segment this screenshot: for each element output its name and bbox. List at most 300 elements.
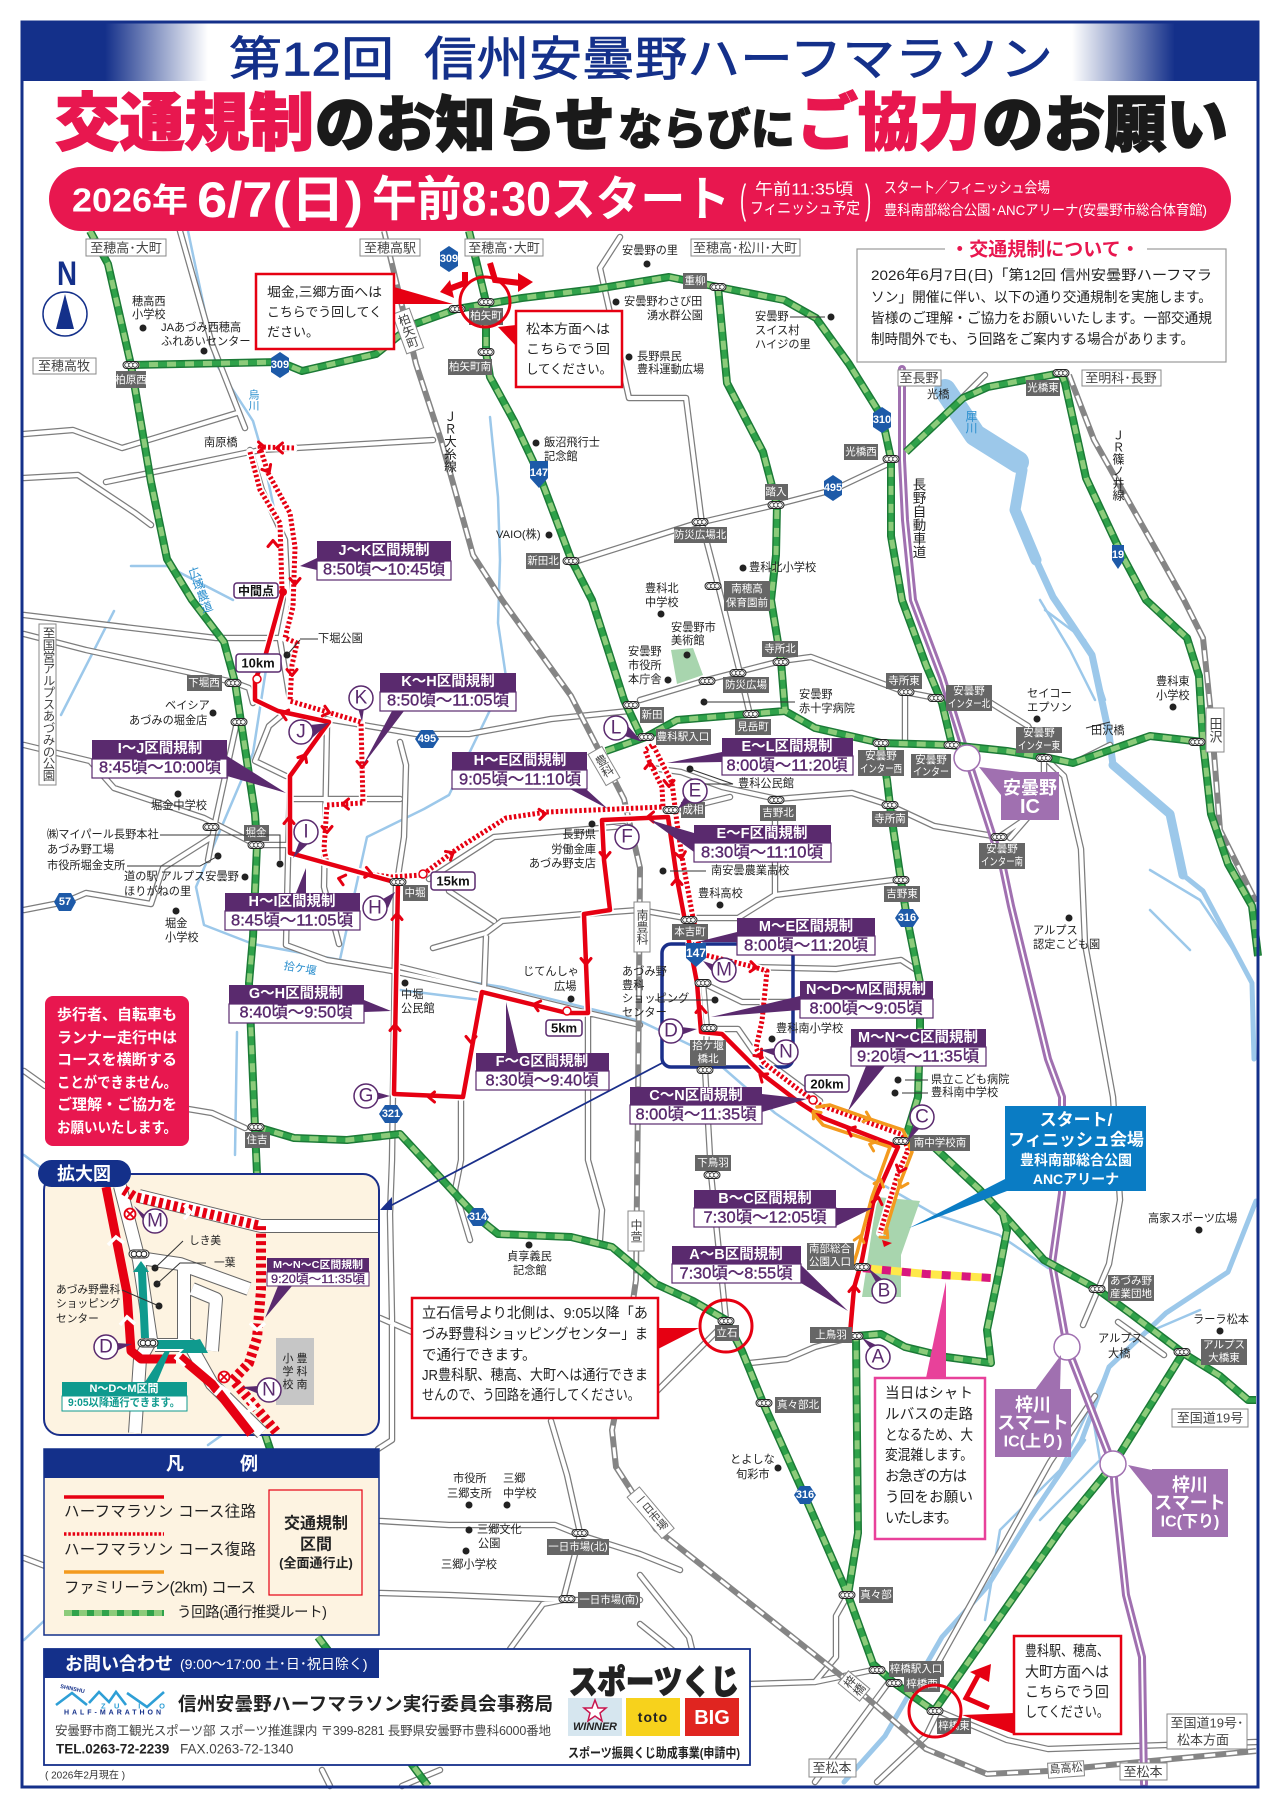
checkpoint letters: J — [296, 722, 306, 742]
organiser text — [55, 1694, 553, 1756]
intersection name labels: 踏入 — [766, 485, 787, 498]
landmarks: 下堀公園 — [318, 632, 363, 645]
direction signs: 柏矢町 — [395, 310, 421, 350]
sports lottery logos: スポーツ振興くじ助成事業(申請中) — [568, 1746, 740, 1760]
callout: Azusabashi detour: 豊科駅、穂高、 — [1025, 1643, 1109, 1660]
course direction arrows — [258, 442, 908, 1292]
landmarks: 堀金中学校 — [151, 798, 207, 812]
sports lottery logos: スポーツくじ — [569, 1664, 739, 1700]
intersection name labels: 安曇野 — [865, 750, 897, 762]
map feature names: 広域農道 — [185, 565, 215, 615]
card N-D-M: N～D～M区間規制 — [806, 981, 926, 998]
compass: N — [57, 255, 77, 293]
intersection name labels — [115, 273, 1247, 1734]
checkpoint letters: L — [611, 718, 621, 738]
intersection name labels: 一日市場(南) — [579, 1593, 639, 1606]
legend panel — [44, 1449, 379, 1635]
kilometre markers: 15km — [436, 874, 470, 888]
card I-J: 8:45頃～10:00頃 — [99, 758, 221, 776]
card E-F — [650, 820, 831, 862]
IC label Azusagawa down — [1128, 1465, 1228, 1537]
legend regulated section box: (全面通行止) — [279, 1556, 353, 1570]
compass — [43, 255, 87, 336]
kilometre markers: 5km — [551, 1020, 577, 1036]
landmarks: 旬彩市 — [736, 1468, 770, 1481]
card B-C: 7:30頃～12:05頃 — [704, 1208, 826, 1226]
legend outbound: ハーフマラソン コース往路 — [64, 1502, 256, 1520]
card E-L — [667, 738, 853, 775]
checkpoint letters: C — [915, 1106, 929, 1128]
card E-L: 8:00頃～11:20頃 — [726, 756, 848, 774]
route shields — [54, 246, 1124, 1504]
intersection name labels: 安曇野 — [915, 754, 947, 766]
legend detour: う回路(通行推奨ルート) — [177, 1604, 327, 1621]
map feature names: 長野自動車道 — [910, 478, 926, 560]
callout: Matsumoto direction: 松本方面へは — [526, 322, 610, 336]
card F-G — [476, 1002, 609, 1090]
kilometre markers: 10km — [241, 656, 275, 670]
direction signs: 至国営アルプスあづみの公園 — [40, 626, 55, 782]
landmarks: 美術館 — [671, 633, 705, 647]
intersection name labels: 新田北 — [527, 555, 559, 567]
intersection name labels: 成相 — [682, 803, 704, 816]
card M-N-C: 9:20頃～11:35頃 — [857, 1048, 979, 1066]
intersection name labels: 産業団地 — [1110, 1287, 1152, 1300]
intersection name labels: 立石 — [716, 1326, 738, 1339]
inset teal arrows — [133, 1261, 208, 1382]
card K-H: 8:50頃～11:05頃 — [387, 692, 509, 710]
railways — [384, 231, 1256, 1774]
marathon logo: SHINSHU — [60, 1684, 85, 1695]
start finish venue box: スタート/ — [1040, 1110, 1113, 1130]
inset course — [106, 1187, 278, 1434]
landmarks: 豊科南中学校 — [931, 1085, 998, 1099]
card A-B: 7:30頃～8:55頃 — [680, 1264, 792, 1282]
organiser text: FAX.0263-72-1340 — [180, 1742, 293, 1756]
intersection name labels: 保育園前 — [726, 596, 768, 609]
map feature names: ＪＲ篠ノ井線 — [1111, 429, 1125, 501]
inset school block: 小学校 — [281, 1352, 294, 1392]
card J-K: J～K区間規制 — [338, 542, 430, 559]
direction signs: 島高松 — [1049, 1760, 1083, 1776]
callout: shuttle bus road: ルバスの走路 — [885, 1406, 974, 1423]
callout: Azusabashi detour — [962, 1636, 1121, 1734]
inset checkpoint letters: N — [262, 1380, 276, 1400]
direction signs: 至穂高駅 — [364, 240, 416, 256]
callout: Horigane direction: ださい。 — [267, 324, 319, 340]
card I-J: I～J区間規制 — [118, 740, 202, 757]
checkpoint letters: H — [368, 898, 382, 918]
notice: pedestrians and cyclists: コースを横断する — [57, 1052, 177, 1068]
landmarks: あづみ野支店 — [529, 857, 596, 870]
callout: shuttle bus road: お急ぎの方は — [885, 1468, 967, 1485]
legend panel: 例 — [240, 1454, 258, 1474]
intersection name labels: 下鳥羽 — [697, 1156, 729, 1169]
intersection name labels: 真々部 — [860, 1588, 892, 1601]
route shields: 321 — [382, 1108, 400, 1120]
marker circle: Tateishi — [700, 1300, 752, 1352]
route shields: 314 — [469, 1211, 488, 1223]
card M-N-C: M～N～C区間規制 — [858, 1029, 978, 1046]
route shields: 495 — [824, 482, 842, 494]
landmarks: 安曇野市 — [671, 621, 716, 634]
landmarks: 三郷支所 — [447, 1486, 492, 1500]
landmarks: 中学校 — [503, 1486, 537, 1500]
checkpoint letters — [289, 686, 934, 1369]
about traffic regulation box: 制時間外でも、う回路をご案内する場合があります。 — [871, 331, 1194, 347]
title: 第12回 — [229, 32, 394, 86]
intersection name labels: 吉野東 — [886, 887, 918, 900]
direction signs: 至松本 — [1123, 1764, 1163, 1780]
landmarks: 長野県民 — [637, 350, 682, 363]
half marathon course outbound — [255, 592, 898, 1334]
checkpoint letters: D — [664, 1020, 678, 1042]
subtitle: 交通規制 — [55, 89, 314, 159]
inset arrow head — [380, 1197, 392, 1210]
checkpoint letters: B — [878, 1280, 890, 1302]
landmarks: 記念館 — [544, 450, 578, 463]
card B-C — [694, 1190, 873, 1227]
intersection name labels: 南中学校南 — [914, 1136, 966, 1149]
IC label Azumino: 安曇野 — [1003, 778, 1057, 798]
map feature names: 烏川 — [247, 388, 260, 411]
contact header: お問い合わせ — [65, 1654, 173, 1674]
marathon logo: ZU I O — [101, 1702, 165, 1710]
landmarks: 中学校 — [645, 595, 679, 609]
notice: pedestrians and cyclists: お願いいたします。 — [57, 1120, 177, 1136]
callout: Matsumoto direction: こちらでう回 — [526, 342, 610, 356]
intersection name labels: 重柳 — [684, 274, 706, 287]
landmarks: 光橋 — [927, 387, 949, 401]
landmarks: 公民館 — [401, 1002, 435, 1015]
landmarks: 道の駅 アルプス安曇野 — [124, 869, 239, 883]
route shields: 310 — [873, 414, 891, 426]
landmarks: アルプス — [1098, 1332, 1143, 1345]
marathon logo — [56, 1684, 165, 1716]
callout: Horigane direction — [256, 274, 453, 349]
inset roads — [120, 1186, 378, 1433]
direction signs: 田沢 — [1208, 717, 1222, 743]
kilometre markers — [234, 583, 849, 1104]
about traffic regulation box — [857, 238, 1226, 362]
intersection name labels: 上鳥羽 — [815, 1328, 847, 1341]
card H-I — [225, 868, 360, 930]
subtitle — [55, 88, 1228, 159]
sports lottery logos — [568, 1664, 740, 1760]
title: 信州安曇野ハーフマラソン — [424, 32, 1053, 86]
callout: Azusabashi detour: してください。 — [1025, 1704, 1109, 1721]
date banner: スタート／フィニッシュ会場 — [884, 180, 1050, 196]
callout: shuttle bus road: となるため、大 — [885, 1427, 973, 1444]
IC label Azusagawa down: 梓川 — [1172, 1475, 1208, 1495]
checkpoint letters: G — [359, 1086, 373, 1106]
inset landmarks: しき美 — [189, 1234, 221, 1247]
landmarks: ふれあいセンター — [161, 335, 251, 348]
landmarks — [47, 244, 1249, 1571]
start finish venue box: 豊科南部総合公園 — [1020, 1152, 1132, 1168]
kilometre markers: 中間点 — [238, 583, 274, 598]
notice: pedestrians and cyclists: ランナー走行中は — [57, 1030, 177, 1046]
card F-G: F～G区間規制 — [496, 1053, 588, 1070]
landmarks: 大橋 — [1108, 1346, 1130, 1360]
start finish venue box — [909, 1106, 1146, 1228]
intersection name labels: 本吉町 — [674, 925, 706, 938]
intersection name labels: 梓橋駅入口 — [890, 1662, 942, 1675]
route shields: 19 — [1112, 549, 1124, 561]
intersection name labels: 公園入口 — [809, 1256, 851, 1268]
landmarks: センター — [622, 1006, 667, 1019]
card C-N: 8:00頃～11:35頃 — [636, 1106, 756, 1124]
sports lottery logos: BIG — [694, 1707, 730, 1729]
map feature names — [185, 388, 1125, 978]
date banner: 豊科南部総合公園･ANCアリーナ(安曇野市総合体育館) — [884, 202, 1207, 218]
intersection name labels: 寺所南 — [874, 812, 906, 825]
intersection name labels: 光橋西 — [845, 445, 877, 458]
interchange circles — [954, 745, 1126, 1477]
date note: ( 2026年2月現在 ) — [45, 1768, 125, 1782]
callout: Tateishi signal: 立石信号より北側は、9:05以降「あ — [422, 1305, 648, 1322]
direction signs: 至長野 — [899, 370, 939, 386]
expressway — [902, 369, 1144, 1784]
landmarks: 高家スポーツ広場 — [1148, 1211, 1237, 1225]
landmarks: 安曇野 — [799, 688, 833, 701]
landmarks: 田沢橋 — [1091, 723, 1125, 737]
map feature names: 拾ケ堰 — [283, 958, 318, 978]
landmarks: 飯沼飛行士 — [544, 435, 600, 449]
landmarks: あづみの堀金店 — [129, 714, 207, 727]
legend family run: ファミリーラン(2km) コース — [64, 1580, 256, 1596]
date banner: ( — [740, 176, 746, 222]
card H-I: H～I区間規制 — [248, 893, 336, 910]
landmarks: じてんしゃ — [523, 965, 579, 978]
date banner: 午前11:35頃 — [755, 180, 853, 198]
notice: pedestrians and cyclists: 歩行者、自転車も — [57, 1006, 177, 1024]
landmarks: セイコー — [1027, 687, 1072, 700]
map feature names: 犀川 — [964, 410, 978, 434]
route shields: 309 — [271, 359, 289, 371]
family run course — [813, 1105, 912, 1268]
intersection name labels: 堀金 — [246, 826, 267, 839]
intersection name labels: 安曇野 — [953, 685, 985, 697]
inset checkpoint letters: D — [99, 1336, 113, 1358]
intersection name labels: 防災広場北 — [674, 528, 727, 541]
inset card N-D-M — [62, 1382, 187, 1411]
inset card N-D-M: 9:05以降通行できます。 — [68, 1395, 180, 1409]
IC label Azumino: IC — [1020, 796, 1040, 818]
landmarks: ㈱マイパール長野本社 — [47, 827, 159, 841]
route shields: 57 — [59, 896, 71, 908]
landmarks: 豊科公民館 — [738, 776, 794, 790]
intersection name labels: 寺所北 — [764, 642, 796, 655]
start finish venue box: フィニッシュ会場 — [1008, 1130, 1144, 1150]
landmarks: 市役所 — [628, 658, 662, 672]
callout: shuttle bus road — [875, 1282, 985, 1539]
callout: shuttle bus road: いたします。 — [885, 1510, 958, 1527]
notice: pedestrians and cyclists — [45, 996, 189, 1146]
direction signs: 松本方面 — [1177, 1732, 1229, 1748]
callout: Azusabashi detour: 大町方面へは — [1025, 1664, 1109, 1681]
callout: Tateishi signal: せんので、う回路を通行してください。 — [422, 1387, 640, 1404]
intersection name labels: 真々部北 — [777, 1398, 819, 1411]
card M-N-C — [848, 1029, 986, 1111]
landmarks: 南安曇農業高校 — [711, 863, 789, 877]
landmarks: 労働金庫 — [551, 842, 596, 856]
landmarks: VAIO(株) — [496, 527, 541, 541]
direction signs: 至穂高･大町 — [90, 240, 162, 256]
card K-H: K～H区間規制 — [401, 673, 495, 690]
inset header pill — [38, 1160, 131, 1187]
route shields: 309 — [440, 253, 458, 265]
inset card M-N-C — [265, 1258, 369, 1318]
card H-E: H～E区間規制 — [474, 752, 566, 769]
landmarks: 豊科運動広場 — [637, 362, 704, 376]
intersection name labels: 吉野北 — [762, 807, 794, 819]
half marathon course return — [250, 447, 908, 1233]
organiser text: 信州安曇野ハーフマラソン実行委員会事務局 — [178, 1694, 553, 1714]
intersection name labels: 豊科駅入口 — [657, 730, 709, 743]
callout: Azusabashi detour: こちらでう回 — [1025, 1684, 1109, 1701]
subtitle: のお願い — [982, 91, 1228, 159]
landmarks: ハイジの里 — [755, 338, 811, 351]
inset landmarks: あづみ野豊科 — [56, 1283, 120, 1296]
route shields: 147 — [530, 467, 548, 479]
intersection name labels: インター西 — [860, 763, 902, 775]
landmarks: 湧水群公園 — [647, 308, 703, 322]
about traffic regulation box: 2026年6月7日(日)「第12回 信州安曇野ハーフマラ — [871, 267, 1212, 283]
checkpoint letters: N — [779, 1042, 793, 1062]
card C-N: C～N区間規制 — [649, 1087, 743, 1104]
direction signs: 至明科･長野 — [1085, 370, 1157, 386]
card M-E: 8:00頃～11:20頃 — [744, 936, 868, 954]
about traffic regulation box: ソン」開催に伴い、以下の通り交通規制を実施します。 — [871, 289, 1212, 305]
card K-H — [363, 673, 516, 765]
intersection name labels: 柏矢町 — [470, 309, 502, 322]
callout: Matsumoto direction — [498, 311, 622, 387]
inset card M-N-C: M～N～C区間規制 — [273, 1258, 363, 1271]
landmarks: 小学校 — [132, 307, 166, 321]
inset school block — [276, 1338, 314, 1405]
intersection name labels: 安曇野 — [986, 843, 1018, 855]
intersection name labels: あづみ野 — [1110, 1275, 1152, 1287]
card G-H — [229, 985, 391, 1023]
route shields: 316 — [898, 912, 916, 924]
contact panel — [44, 1649, 750, 1765]
intersection name labels: 大橋東 — [1208, 1351, 1240, 1364]
intersection name labels: 中堀 — [404, 886, 426, 899]
IC label Azusagawa down: IC(下り) — [1161, 1512, 1219, 1530]
landmarks: JAあづみ西穂高 — [161, 320, 241, 334]
inset landmarks: センター — [56, 1313, 99, 1325]
landmarks: 豊科東 — [1156, 674, 1190, 688]
callout: Tateishi signal: で通行できます。 — [422, 1347, 537, 1364]
kilometre markers: 20km — [810, 1076, 844, 1092]
intersection name labels: 柏原西 — [115, 373, 147, 386]
direction signs: 至穂高牧 — [38, 358, 90, 374]
contact header — [44, 1649, 379, 1678]
inset no entry marks — [124, 1208, 230, 1382]
intersection name labels: 光橋東 — [1027, 381, 1059, 394]
card J-K: 8:50頃～10:45頃 — [323, 560, 445, 578]
landmarks: 穂高西 — [132, 294, 166, 308]
IC label Azusagawa up — [995, 1355, 1071, 1457]
card H-I: 8:45頃～11:05頃 — [231, 912, 353, 930]
notice: pedestrians and cyclists: ことができません。 — [57, 1074, 177, 1092]
checkpoint letters: A — [872, 1346, 885, 1368]
direction signs: 至松本 — [812, 1760, 852, 1776]
landmarks: 公園 — [478, 1537, 500, 1550]
section cards — [92, 541, 986, 1311]
callout: Tateishi signal: JR豊科駅、穂高、大町へは通行できま — [422, 1367, 648, 1384]
landmarks: 市役所 — [453, 1471, 487, 1485]
landmarks: 小学校 — [165, 930, 199, 944]
landmarks: 貞享義民 — [507, 1249, 552, 1263]
intersection name labels: 南穂高 — [731, 582, 763, 595]
parks — [671, 648, 920, 1297]
inset signals — [129, 1250, 158, 1347]
landmarks: あづみ野工場 — [47, 843, 114, 856]
callout: Horigane direction: 堀金,三郷方面へは — [267, 284, 382, 300]
card I-J — [92, 740, 286, 793]
date banner: 6/7(日) — [197, 172, 363, 228]
organiser text: 安曇野市商工観光スポーツ部 スポーツ推進課内 〒399-8281 長野県安曇野市豊科6000番地 — [55, 1723, 551, 1738]
detour routes — [90, 231, 1258, 1786]
callout: shuttle bus road: 当日はシャト — [885, 1385, 973, 1402]
date banner: 午前8:30スタート — [372, 174, 730, 226]
card E-L: E～L区間規制 — [741, 738, 833, 755]
intersection name labels: アルプス — [1203, 1339, 1245, 1351]
detour arrow and circle at Azusabashi — [909, 1664, 991, 1737]
landmarks: 長野県 — [562, 828, 596, 841]
direction signs: 中萱 — [629, 1218, 643, 1243]
direction signs: 至穂高･松川･大町 — [693, 240, 797, 256]
IC label Azusagawa down: スマート — [1154, 1493, 1226, 1513]
shuttle road — [862, 1268, 991, 1278]
traffic signals — [123, 284, 1205, 1714]
landmarks: 豊科南小学校 — [776, 1021, 843, 1035]
intersection name labels: 梓橋東 — [938, 1719, 970, 1732]
card N-D-M: 8:00頃～9:05頃 — [810, 1000, 922, 1018]
detour arrows at Hakushi-machi — [440, 263, 533, 327]
subtitle: ご協力 — [797, 88, 980, 158]
landmarks: 安曇野の里 — [622, 244, 678, 257]
date banner: フィニッシュ予定 — [750, 200, 860, 218]
landmarks: 県立こども病院 — [931, 1072, 1009, 1086]
inset header pill: 拡大図 — [57, 1164, 111, 1184]
direction signs: 至国道19号 — [1177, 1410, 1243, 1426]
landmarks: ベイシア — [165, 700, 210, 712]
intersection name labels: 下堀西 — [188, 677, 220, 689]
landmarks: 堀金 — [165, 917, 187, 930]
landmarks: アルプス — [1033, 924, 1078, 937]
callout: Matsumoto direction: してください。 — [526, 362, 612, 376]
intersection name labels: インター南 — [981, 855, 1023, 868]
inset direction arrows — [108, 1205, 265, 1412]
landmarks: 中堀 — [401, 988, 423, 1001]
landmarks: 安曇野わさび田 — [624, 295, 702, 308]
IC label Azusagawa up: 梓川 — [1015, 1395, 1051, 1415]
IC label Azusagawa up: スマート — [997, 1413, 1069, 1433]
title — [229, 32, 1053, 86]
notice: pedestrians and cyclists: ご理解・ご協力を — [57, 1096, 177, 1114]
landmarks: 三郷小学校 — [441, 1557, 497, 1571]
legend panel: 凡 — [166, 1454, 184, 1474]
landmarks: 豊科北 — [645, 581, 679, 595]
card E-F: E～F区間規制 — [716, 825, 808, 842]
card A-B — [672, 1246, 848, 1311]
landmarks: スイス村 — [755, 323, 799, 337]
checkpoint letters: I — [303, 822, 309, 842]
direction signs: 至穂高･大町 — [468, 240, 540, 256]
